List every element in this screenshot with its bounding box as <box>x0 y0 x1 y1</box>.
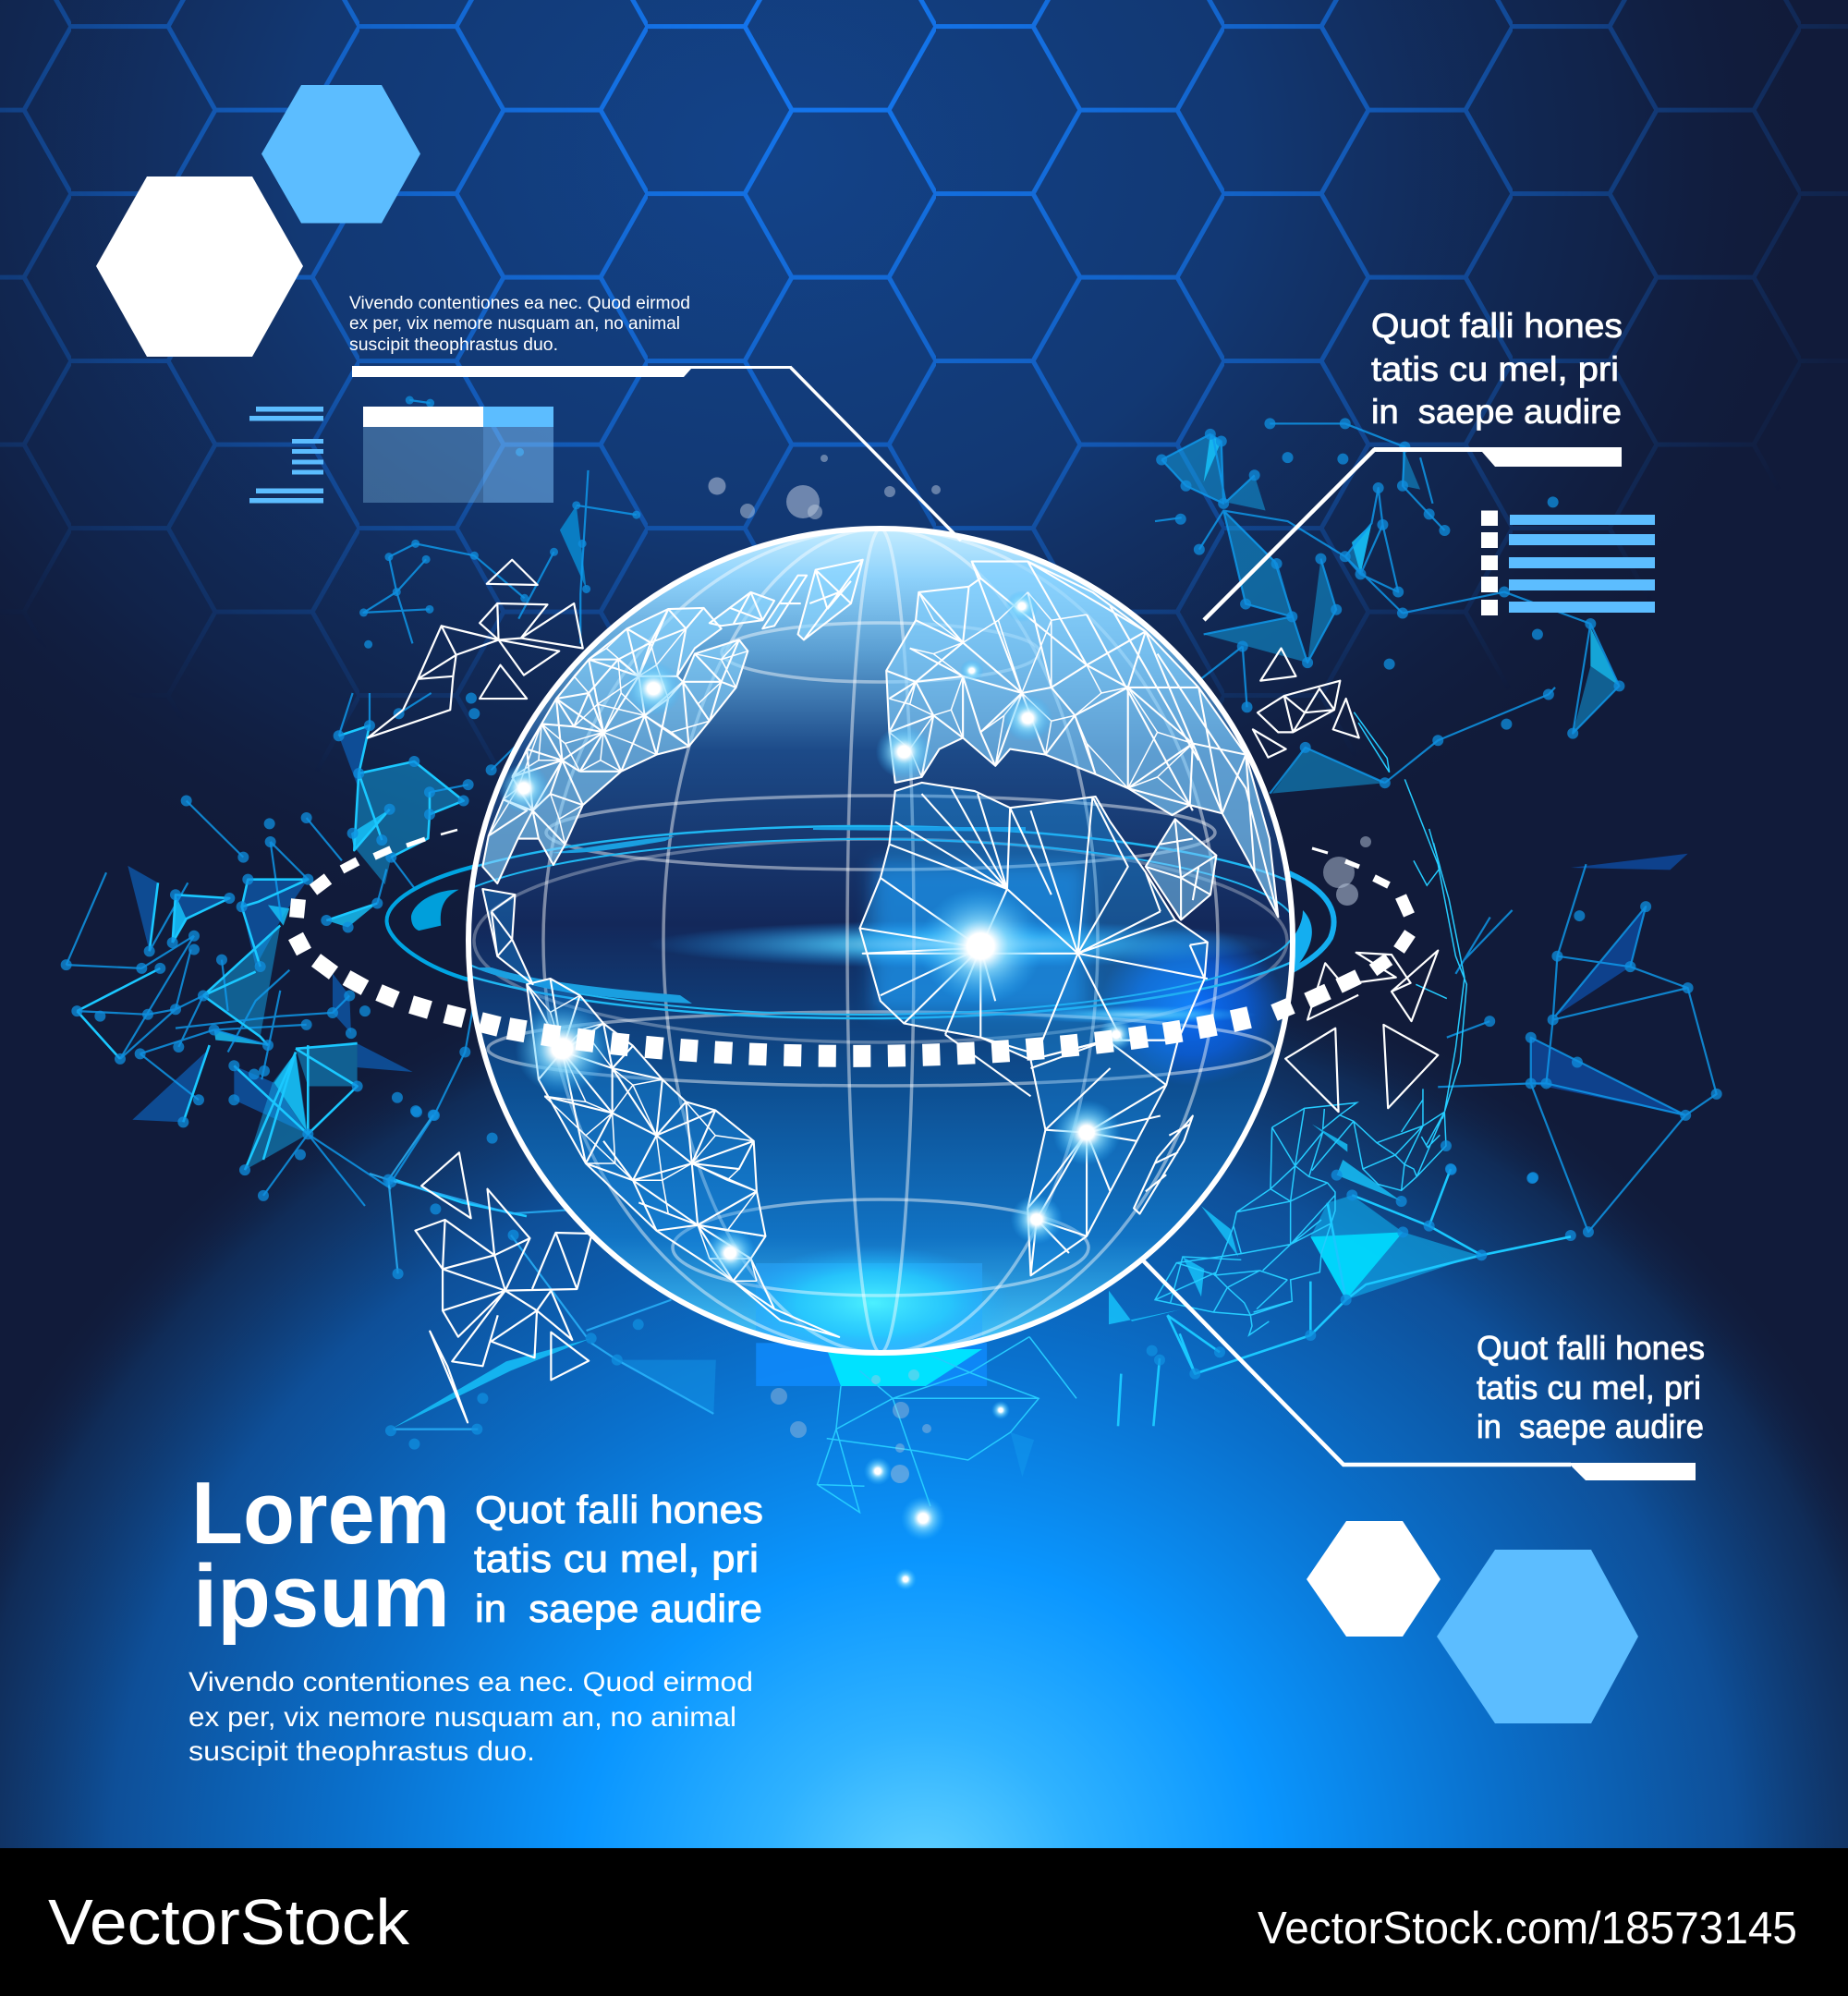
icon: right list <box>1481 510 1655 615</box>
white wireframe shards: upper left and right top <box>368 560 1359 758</box>
honeycomb grid <box>0 0 1848 776</box>
text: lower right callout <box>1477 1329 1705 1445</box>
text: top left description: ex per, vix nemore nusquam an, no animal <box>349 313 680 334</box>
hexagon: white bottom right <box>1307 1521 1441 1637</box>
globe body <box>468 529 1293 1353</box>
continent fills <box>482 560 1278 1337</box>
globe <box>466 526 1295 1356</box>
title <box>191 1464 450 1646</box>
arabia mesh <box>1146 819 1216 919</box>
text: bottom description: Vivendo contentiones ea nec. Quod eirmod <box>188 1667 753 1698</box>
text: top right callout: tatis cu mel, pri <box>1371 350 1619 388</box>
leader line: top right <box>1204 447 1622 620</box>
network: far right <box>1354 712 1717 1235</box>
south america fine mesh <box>527 984 765 1281</box>
text: top right callout: Quot falli hones <box>1371 307 1623 345</box>
globe inner glows <box>647 864 1284 1360</box>
wire sphere edge <box>1354 712 1466 1119</box>
text: top left description: Vivendo contentiones ea nec. Quod eirmod <box>349 293 690 313</box>
globe grid lines <box>474 529 1287 1353</box>
central america mesh <box>482 889 533 984</box>
footer band <box>0 1848 1848 1996</box>
north america fine mesh <box>489 628 748 845</box>
text: lower right callout: tatis cu mel, pri <box>1477 1369 1701 1406</box>
cyan polygon mesh: lower right <box>1109 1086 1571 1426</box>
text: bottom description <box>188 1667 753 1767</box>
leader line: top left <box>352 366 961 541</box>
title: ipsum <box>193 1547 450 1646</box>
icon: block chart <box>363 407 553 503</box>
network: below globe <box>370 1112 1076 1513</box>
bokeh dots <box>708 455 1371 1483</box>
text: top right callout: in saepe audire <box>1371 393 1622 431</box>
subtitle: tatis cu mel, pri <box>474 1537 759 1580</box>
text: top right callout <box>1371 307 1623 431</box>
network: upper left near globe <box>364 400 637 644</box>
south america mesh <box>527 979 839 1337</box>
hexagon: blue bottom right <box>1437 1550 1638 1723</box>
subtitle: in saepe audire <box>475 1587 762 1630</box>
footer url: VectorStock.com/18573145 <box>1258 1904 1797 1953</box>
subtitle <box>474 1488 763 1630</box>
dotted orbit ring: back dashes <box>297 830 1409 918</box>
subtitle: Quot falli hones <box>475 1488 763 1531</box>
hexagon: blue top left <box>261 85 420 224</box>
text: bottom description: suscipit theophrastus duo. <box>188 1736 535 1767</box>
icon: left stacked bars <box>249 407 323 503</box>
text: top left description <box>349 293 690 355</box>
city lights <box>498 590 1134 1278</box>
north america mesh <box>482 608 748 883</box>
continents <box>482 560 1278 1337</box>
arctic islands mesh <box>710 560 863 639</box>
leader line: lower right <box>1140 1258 1696 1480</box>
globe cyan rings <box>471 824 1290 1020</box>
eurasia mesh <box>886 562 1278 917</box>
eurasia fine mesh <box>889 592 1193 805</box>
text: lower right callout: in saepe audire <box>1477 1407 1704 1445</box>
globe outline <box>468 529 1293 1353</box>
africa mesh <box>860 783 1208 1060</box>
network: upper right <box>1155 423 1619 794</box>
bright sparks below globe <box>864 1401 1010 1590</box>
southern africa mesh <box>945 1035 1178 1275</box>
text: top left description: suscipit theophrastus duo. <box>349 335 558 355</box>
madagascar mesh <box>1134 1116 1193 1214</box>
hexagon: white top left <box>96 176 303 357</box>
text: bottom description: ex per, vix nemore nusquam an, no animal <box>188 1702 736 1733</box>
footer logo: VectorStock <box>48 1886 410 1958</box>
white wireframe shards: right lower <box>1285 951 1438 1112</box>
outer cyan orbit rings: right <box>1155 873 1334 1016</box>
network: left <box>67 693 527 1216</box>
text: lower right callout: Quot falli hones <box>1477 1329 1705 1367</box>
white wireframe shards: lower left <box>415 1152 592 1422</box>
title: Lorem <box>191 1464 450 1563</box>
dotted orbit ring: front dashes <box>296 933 1410 1056</box>
